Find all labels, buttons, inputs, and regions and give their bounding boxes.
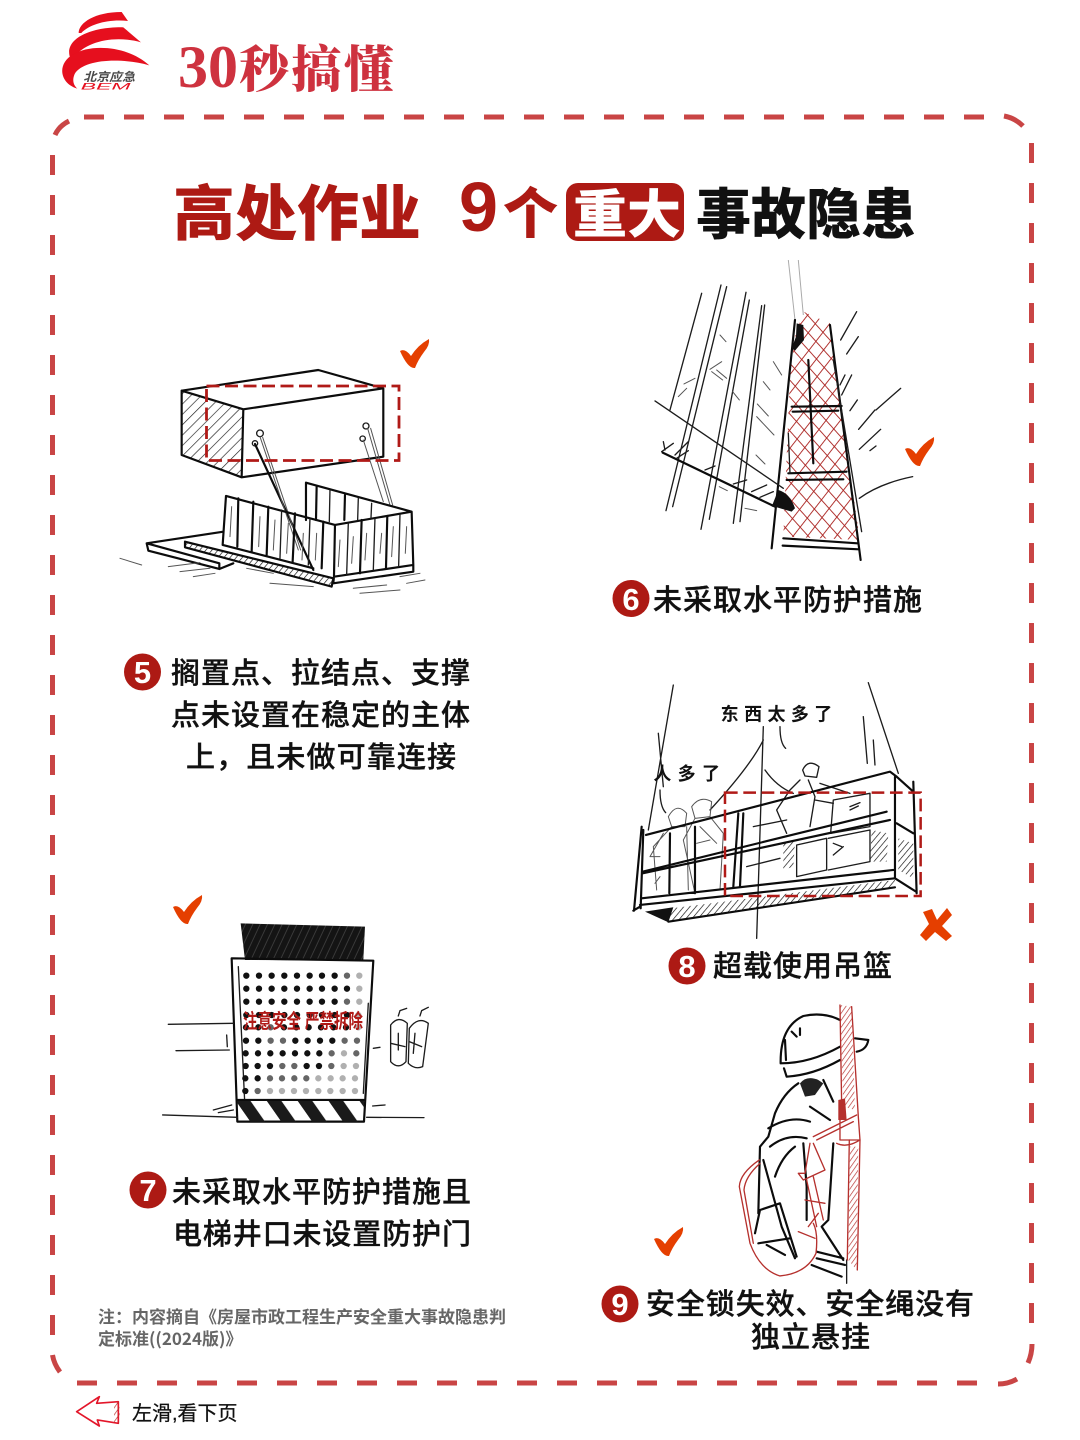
basket frame bbox=[633, 772, 917, 911]
helmet bbox=[781, 1015, 868, 1077]
caption 5: 5 bbox=[134, 655, 151, 690]
header: 30秒搞懂: 秒搞懂 bbox=[239, 30, 394, 102]
door panel bbox=[232, 958, 373, 1122]
caption 5: 上，且未做可靠连接 bbox=[186, 741, 456, 774]
hazard stripes bbox=[237, 1100, 364, 1122]
cross mark: 8 bbox=[920, 908, 952, 941]
caption 9 bbox=[602, 1286, 974, 1354]
head bbox=[800, 1078, 823, 1097]
illustration 6: horizontal protection net bbox=[655, 260, 913, 560]
title: 重大 bbox=[573, 187, 681, 245]
footnote: 定标准((2024版)》 bbox=[98, 1325, 242, 1350]
check mark: 6 bbox=[905, 437, 934, 466]
check mark: 9 bbox=[654, 1227, 683, 1256]
caption 8: 8 bbox=[678, 949, 696, 984]
fence bbox=[223, 483, 413, 583]
workers bbox=[650, 763, 850, 893]
suspension ropes bbox=[648, 683, 898, 938]
caption 5 bbox=[124, 654, 470, 774]
rope hatch bbox=[840, 1005, 855, 1110]
perforation dots bbox=[245, 976, 359, 1091]
illustration 8: overloaded gondola bbox=[633, 683, 921, 938]
sign text: 注意安全 严禁拆除 bbox=[243, 1009, 363, 1033]
caption 8: 超载使用吊篮 bbox=[713, 950, 892, 983]
title: 高处作业 bbox=[173, 181, 421, 248]
caption 9: 9 bbox=[611, 1287, 629, 1322]
check mark: 7 bbox=[173, 895, 202, 924]
title bbox=[173, 168, 916, 248]
scribbles bbox=[840, 312, 913, 498]
speech labels bbox=[653, 704, 832, 784]
harness and lanyard bbox=[739, 1113, 860, 1276]
diagonal pole bbox=[655, 401, 783, 488]
logo: 北京应急 BEM bbox=[62, 12, 149, 91]
caption 7: 未采取水平防护措施且 bbox=[172, 1176, 471, 1209]
ground scribbles bbox=[120, 558, 425, 593]
fire extinguishers bbox=[391, 1007, 428, 1068]
dark shaft bbox=[241, 923, 365, 961]
body bbox=[755, 1083, 845, 1277]
footnote bbox=[98, 1303, 506, 1350]
illustration 7: elevator shaft guard door bbox=[163, 923, 428, 1122]
caption 9: 安全锁失效、安全绳没有 bbox=[646, 1288, 974, 1321]
caption 7: 7 bbox=[139, 1173, 157, 1208]
caption 6: 未采取水平防护措施 bbox=[653, 584, 922, 617]
caption 8 bbox=[668, 948, 892, 984]
lower planks bbox=[147, 532, 233, 569]
logo: 北京应急 BEM: BEM bbox=[81, 81, 131, 91]
footnote: 注：内容摘自《房屋市政工程生产安全重大事故隐患判 bbox=[98, 1303, 506, 1328]
illustration 9: worker with safety rope bbox=[739, 1005, 868, 1283]
caption 5: 点未设置在稳定的主体 bbox=[171, 699, 470, 732]
check mark: 5 bbox=[400, 339, 429, 368]
dashed highlight bbox=[725, 793, 921, 896]
title: 9 bbox=[459, 168, 498, 246]
cargo boxes bbox=[747, 793, 870, 877]
caption 5: 搁置点、拉结点、支撑 bbox=[171, 657, 470, 690]
caption 6: 6 bbox=[622, 582, 640, 617]
box hatch face bbox=[182, 391, 243, 477]
header: 30秒搞懂: 30 bbox=[178, 34, 238, 100]
speech labels: 东西太多了 bbox=[721, 704, 832, 725]
walls bbox=[163, 1023, 424, 1118]
logo: 北京应急 BEM: 北京应急 bbox=[83, 70, 135, 84]
caption 9: 独立悬挂 bbox=[751, 1321, 870, 1354]
title: 个 bbox=[503, 183, 558, 245]
caption 7 bbox=[130, 1172, 471, 1251]
icon: left arrow bbox=[77, 1397, 120, 1426]
knot bbox=[792, 323, 804, 351]
poles bbox=[666, 285, 765, 529]
caption 7: 电梯井口未设置防护门 bbox=[173, 1218, 471, 1251]
dashed rounded frame bbox=[52, 116, 1032, 1384]
speech labels: 人多了 bbox=[653, 764, 720, 784]
next page text: 左滑,看下页 bbox=[132, 1402, 238, 1425]
highlight box: 5 bbox=[206, 386, 399, 460]
net bbox=[783, 312, 860, 540]
basket floor hatch bbox=[645, 880, 895, 922]
title: 事故隐患 bbox=[696, 184, 916, 246]
illustration 5: cantilever box and fence bbox=[120, 370, 425, 593]
